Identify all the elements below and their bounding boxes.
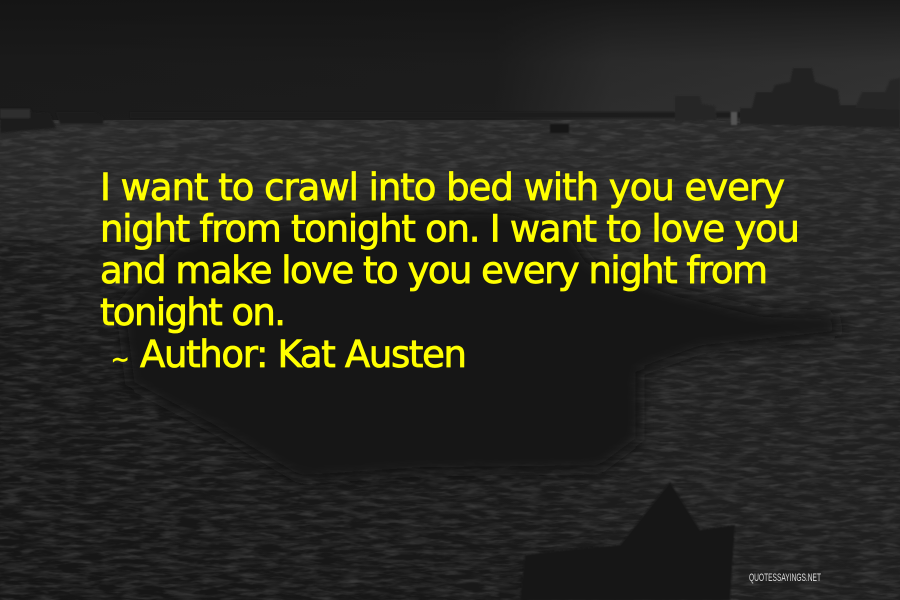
quote text: tonight on. xyxy=(100,291,286,334)
background: dark water xyxy=(0,120,900,600)
watermark: QUOTESSAYINGS.NET xyxy=(749,572,821,584)
quote text: and make love to you every night from xyxy=(100,249,768,292)
far shoreline and ships xyxy=(0,68,900,133)
quote text: I want to crawl into bed with you every xyxy=(100,166,785,209)
quote text xyxy=(100,166,800,334)
background: night sky xyxy=(0,0,900,125)
author line: Author: Kat Austen xyxy=(140,333,467,376)
author line: ~ xyxy=(111,348,129,373)
boat silhouette xyxy=(120,209,840,600)
quote text: night from tonight on. I want to love you xyxy=(100,208,800,250)
